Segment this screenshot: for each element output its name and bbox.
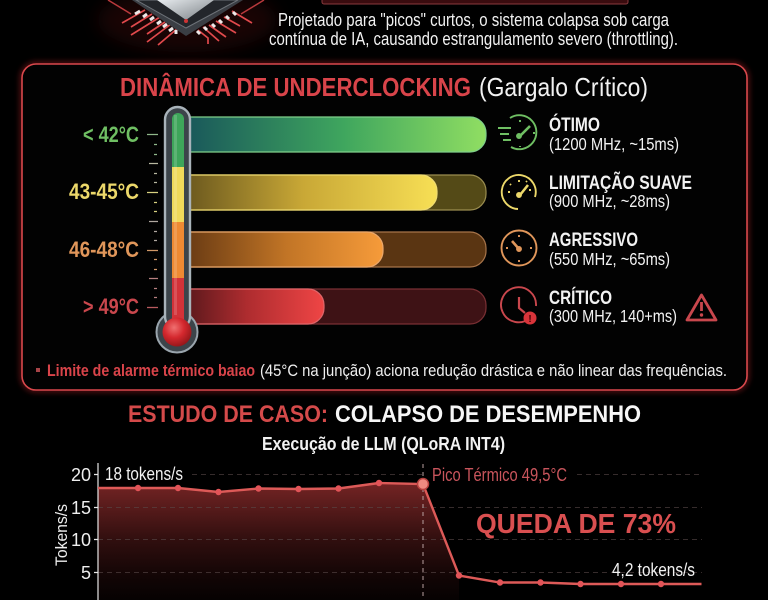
status text: optimal [549,114,679,154]
icon: processor chip [97,0,277,52]
temperature labels [69,122,139,319]
status text: critical: CRÍTICO [549,287,612,309]
case study heading: ESTUDO DE CASO: [128,401,328,428]
temperature scale ticks [147,134,158,308]
grid lines [98,474,702,572]
footnote [36,361,727,380]
status text: soft limitation: LIMITAÇÃO SUAVE [549,172,692,194]
axis labels [71,465,91,583]
icon: clock critical: ! [528,314,532,325]
icon: gauge soft limitation [502,175,536,209]
axis labels: 15 [71,498,91,518]
intro text: contínua de IA, causando estrangulamento severo (throttling). [269,29,678,49]
footnote: Limite de alarme térmico baiao [47,361,255,380]
axis labels: 10 [71,530,91,550]
y axis title: Tokens/s [52,504,71,566]
temperature labels: < 42°C [83,122,139,147]
bar: optimal [170,117,486,152]
line chart: tokens per second [52,463,702,600]
panel heading: (Gargalo Crítico) [479,72,648,102]
axes [94,463,98,600]
intro text: Projetado para "picos" curtos, o sistema colapsa sob carga [278,10,670,30]
chart subtitle: Execução de LLM (QLoRA INT4) [262,434,505,454]
icon: clock critical [501,287,536,325]
temperature labels: > 49°C [83,294,139,319]
status text: optimal: ÓTIMO [549,114,600,136]
data line [98,483,702,584]
icon: warning triangle [687,295,716,320]
peak label: Pico Térmico 49,5°C [432,465,567,485]
panel: underclocking dynamics [22,64,747,390]
peak marker line [422,464,424,600]
bar: aggressive [170,232,486,267]
status text: aggressive [549,230,670,269]
axis labels: 20 [71,465,91,485]
thermometer [156,107,198,352]
temperature labels: 46-48°C [69,237,139,262]
status text: aggressive: (550 MHz, ~65ms) [549,249,670,269]
icon: gauge aggressive [502,230,536,266]
temperature labels: 43-45°C [69,179,139,204]
status text: optimal: (1200 MHz, ~15ms) [549,134,679,154]
panel heading: DINÂMICA DE UNDERCLOCKING [120,72,471,102]
bar: soft limitation [170,175,486,210]
peak point [418,478,428,490]
drop callout: QUEDA DE 73% [476,508,676,539]
end value label: 4,2 tokens/s [612,560,695,580]
data points [135,480,664,587]
status text: soft limitation: (900 MHz, ~28ms) [549,191,670,211]
intro text [269,10,678,49]
status text: critical [549,287,677,326]
status text: critical: (300 MHz, 140+ms) [549,306,677,326]
case study heading [128,401,641,428]
start value label: 18 tokens/s [105,464,183,484]
status text: soft limitation [549,172,692,211]
bar: critical [170,289,486,324]
icon: speedometer optimal [498,115,536,149]
status text: aggressive: AGRESSIVO [549,230,638,251]
top banner remnant [322,0,628,4]
chart area fill [98,483,459,600]
case study heading: COLAPSO DE DESEMPENHO [335,401,641,428]
axis labels: 5 [81,563,91,583]
